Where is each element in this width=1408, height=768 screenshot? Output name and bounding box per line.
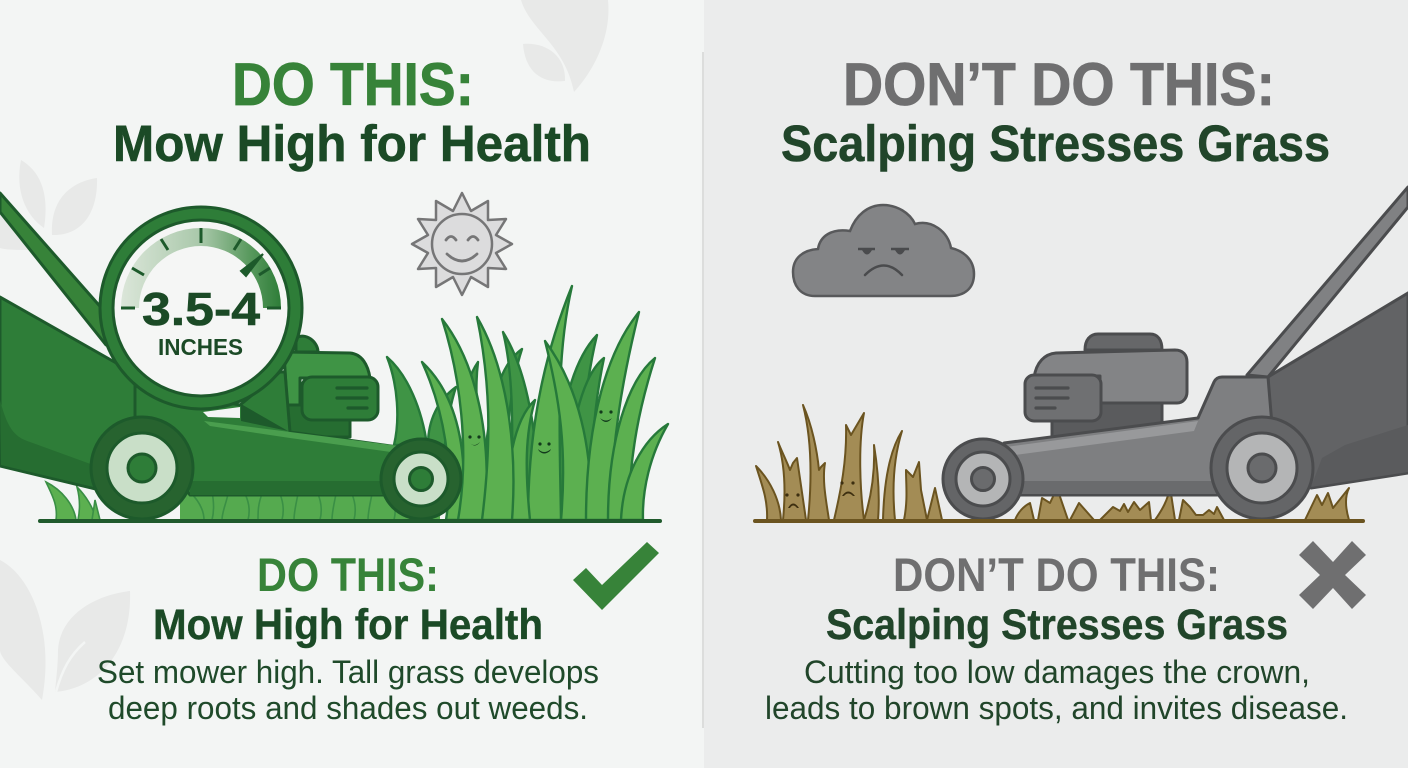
background leaves: left panel <box>0 0 608 700</box>
short grass under mower <box>46 482 440 520</box>
caption: don't do this: leads to brown spots, and invites disease. <box>765 690 1348 726</box>
gauge value <box>142 283 260 360</box>
panel: do this background <box>0 0 704 768</box>
lawn mower: gray <box>943 187 1408 519</box>
panel: don't do this background <box>704 0 1408 768</box>
mower handle <box>0 193 106 345</box>
gray deck and riser <box>995 377 1272 495</box>
caption: don't do this: Scalping Stresses Grass <box>826 601 1288 649</box>
gray handle <box>1247 187 1408 377</box>
gauge value: 3.5-4 <box>142 283 260 335</box>
scalped brown grass <box>756 405 1349 520</box>
sad grass faces <box>785 481 855 508</box>
mower riser and deck <box>135 372 420 495</box>
gray front wheel <box>943 439 1023 519</box>
heading: do this: DO THIS: <box>232 51 474 118</box>
rear wheel <box>91 417 193 519</box>
gray engine <box>1025 334 1187 437</box>
caption: do this: Set mower high. Tall grass develops <box>97 654 599 690</box>
front blades <box>422 286 668 520</box>
gauge arc <box>121 228 281 308</box>
height gauge magnifier <box>100 207 302 431</box>
caption: don't do this: Cutting too low damages the crown, <box>804 654 1310 690</box>
tall healthy grass <box>387 286 668 520</box>
caption: do this <box>97 548 599 726</box>
caption: do this: deep roots and shades out weeds. <box>108 690 588 726</box>
gauge value: INCHES <box>158 334 243 360</box>
icon: check mark <box>573 542 659 610</box>
back blades <box>387 332 604 520</box>
icon: x mark <box>1299 541 1366 609</box>
gray grass bag <box>1268 293 1408 488</box>
heading: do this: Mow High for Health <box>113 115 591 172</box>
heading: don't do this: Scalping Stresses Grass <box>781 115 1330 172</box>
ground line: right <box>753 519 1365 523</box>
heading: do this <box>113 51 591 172</box>
center divider <box>702 52 704 728</box>
gap below the magnifier <box>203 407 240 418</box>
heading: don't do this <box>781 51 1330 172</box>
heading: don't do this: DON’T DO THIS: <box>843 51 1275 118</box>
front wheel <box>381 439 461 519</box>
ground line: left <box>38 519 662 523</box>
grass catcher bag <box>0 297 136 490</box>
caption: don't do this: DON’T DO THIS: <box>893 548 1220 601</box>
grass faces <box>468 410 613 454</box>
icon: smiling sun <box>412 193 512 295</box>
gray rear wheel <box>1211 417 1313 519</box>
caption: don't do this <box>765 548 1348 726</box>
icon: frowning cloud <box>793 205 974 296</box>
gauge needle <box>241 254 263 276</box>
caption: do this: Mow High for Health <box>153 601 543 649</box>
caption: do this: DO THIS: <box>257 548 439 601</box>
lawn mower: green <box>0 193 461 519</box>
engine <box>284 336 378 437</box>
